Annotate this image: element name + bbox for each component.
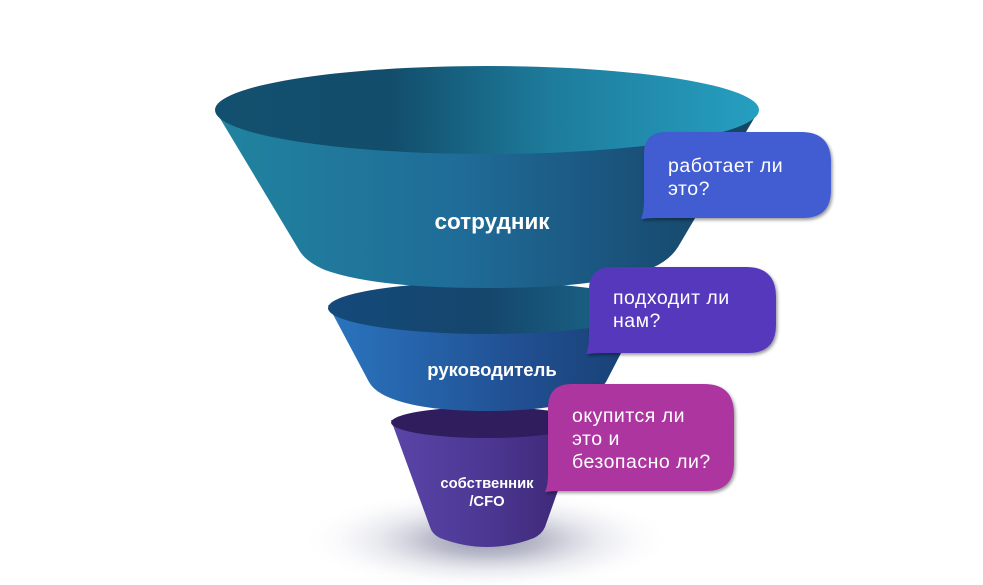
funnel tier: руководитель <box>328 282 646 411</box>
tier label: руководитель <box>427 359 557 380</box>
speech bubble: подходит ли нам? <box>586 267 776 354</box>
bubble text: окупится ли <box>572 405 685 427</box>
bubble shape <box>641 132 831 219</box>
tier label line 2: /CFO <box>469 494 505 510</box>
tier label: сотрудник <box>434 209 550 234</box>
bubble text: нам? <box>613 310 661 332</box>
funnel tier: сотрудник <box>215 66 759 288</box>
tier rim <box>328 282 646 334</box>
tier rim <box>391 407 583 438</box>
bubble text: это и <box>572 428 620 450</box>
bubble text: это? <box>668 178 710 200</box>
bubble text: работает ли <box>668 155 783 177</box>
tier rim <box>215 66 759 154</box>
bubble shape <box>545 384 734 492</box>
speech bubble: окупится ли это и безопасно ли? <box>545 384 734 492</box>
tier label: собственник <box>440 476 534 492</box>
tier body <box>391 420 583 547</box>
bubble shape <box>586 267 776 354</box>
tier body <box>328 305 646 411</box>
bubble text: безопасно ли? <box>572 451 711 473</box>
tier body <box>215 110 759 288</box>
bubble text: подходит ли <box>613 287 730 309</box>
funnel tier: собственник <box>391 407 583 547</box>
speech bubble: работает ли это? <box>641 132 831 219</box>
ground shadow <box>307 490 667 585</box>
